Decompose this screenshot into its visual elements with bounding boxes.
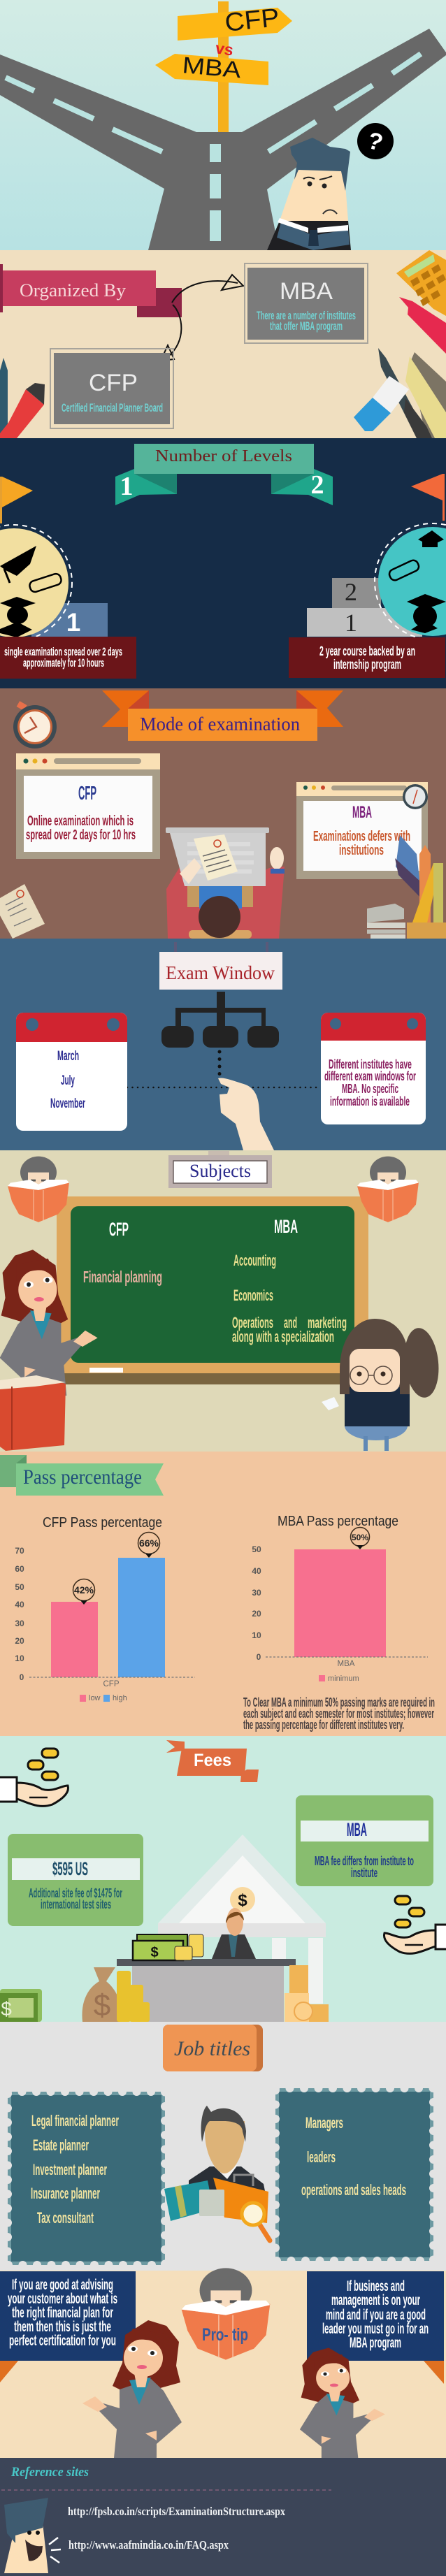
panel: MBA fee: institute	[351, 1866, 377, 1880]
ribbon: organized by	[0, 264, 182, 317]
panel: MBA levels note	[289, 637, 445, 678]
illustration: confused man	[267, 138, 351, 250]
tab: job titles: Job titles	[174, 2037, 250, 2060]
link: aafm: http://www.aafmindia.co.in/FAQ.aspx	[69, 2538, 229, 2552]
icon: reader with book	[182, 2268, 270, 2360]
ribbon: fees	[166, 1740, 259, 1782]
panel: CFP fee: international test sites	[41, 1897, 111, 1911]
bar chart: MBA pass percentage: 0	[257, 1652, 261, 1662]
title: vs: vs	[215, 38, 234, 59]
sign: subjects	[168, 1151, 272, 1188]
steps: CFP level	[31, 603, 108, 637]
icon: question mark bubble	[357, 123, 394, 159]
steps: CFP level: 1	[66, 608, 80, 637]
icon: pen and pencils	[378, 348, 446, 438]
panel: CFP exam mode window: Online examination which is	[27, 813, 134, 829]
panel: CFP fee: Additional site fee of $1475 for	[29, 1886, 122, 1900]
illustration: teacher	[0, 1250, 98, 1396]
panel: MBA fee	[296, 1795, 433, 1886]
steps: MBA levels: 1	[345, 609, 357, 637]
panel: MBA exam mode window	[296, 782, 428, 879]
icon: orange flag left	[0, 477, 33, 523]
bar chart: MBA pass percentage: MBA	[338, 1660, 355, 1668]
panel: CFP pro-tip: them then this is just the	[14, 2319, 111, 2335]
panel: CFP levels note	[0, 637, 136, 679]
panel: CFP job titles: Legal financial planner	[31, 2112, 119, 2129]
illustration: bank building	[158, 1835, 326, 2004]
icon: graduation circle left	[0, 525, 72, 641]
bar chart: CFP pass percentage: high	[113, 1694, 127, 1702]
ribbon: number of levels: Number of Levels	[155, 447, 292, 465]
heading: reference sites: Reference sites	[10, 2465, 89, 2480]
panel: CFP levels note: single examination spread over 2 days	[4, 645, 122, 658]
illustration: banker at desk	[117, 1908, 296, 2022]
tab: job titles	[163, 2025, 263, 2071]
calendar: MBA exam note: MBA. No specific	[342, 1082, 398, 1096]
panel: CFP exam mode window	[16, 753, 160, 859]
chart: org tree	[161, 992, 279, 1048]
bar chart: CFP pass percentage: 40	[15, 1600, 24, 1609]
bar chart: CFP pass percentage	[15, 1515, 195, 1702]
panel: MBA exam mode window: MBA	[352, 803, 372, 822]
text: CFP subjects: Financial planning	[83, 1268, 162, 1286]
icon: dollar badge	[230, 1887, 255, 1912]
section: pass percentage	[0, 1452, 446, 1736]
title: MBA: MBA	[181, 52, 242, 82]
icon: reader left	[8, 1157, 69, 1222]
panel: MBA pro-tip: MBA program	[350, 2335, 401, 2351]
arrow: to MBA	[172, 275, 243, 303]
sign: exam window: Exam Window	[166, 962, 275, 983]
bar chart: MBA pass percentage: MBA Pass percentage	[278, 1514, 398, 1529]
bar chart: MBA pass percentage: 50%	[352, 1533, 368, 1542]
text: MBA subjects: Economics	[233, 1287, 273, 1304]
panel: CFP job titles: Estate planner	[33, 2136, 89, 2154]
steps: MBA levels	[307, 578, 422, 637]
bar chart: MBA pass percentage: 20	[252, 1609, 261, 1619]
ribbon: mode of examination: Mode of examination	[140, 714, 300, 735]
title: CFP: CFP	[224, 3, 280, 37]
bar chart: CFP pass percentage: low	[89, 1694, 101, 1702]
signpost	[155, 1, 292, 133]
panel: CFP fee	[8, 1834, 143, 1926]
link: fpsb: http://fpsb.co.in/scripts/ExaminationStructure.aspx	[68, 2505, 285, 2518]
icon: money bag: $	[94, 1988, 110, 2023]
icon: teal pencil	[0, 358, 8, 438]
text: MBA subjects: MBA	[274, 1216, 298, 1237]
icon: cash stack	[133, 1934, 203, 1960]
ribbon: number of levels: 1	[120, 472, 133, 501]
panel: CFP exam mode window: CFP	[78, 782, 96, 804]
bar chart: MBA pass percentage	[252, 1514, 428, 1683]
icon: red books	[0, 1375, 66, 1451]
calendar: CFP exam months: March	[57, 1049, 79, 1064]
text: pro-tip: Pro- tip	[202, 2325, 248, 2345]
illustration: job seeker with briefcases	[164, 2106, 270, 2241]
bar chart: CFP pass percentage: 66%	[139, 1537, 159, 1549]
calendar: CFP exam months	[16, 1013, 127, 1131]
illustration: shouting man	[4, 2498, 61, 2573]
bar chart: CFP pass percentage: 42%	[74, 1584, 94, 1595]
text: MBA subjects	[232, 1216, 347, 1345]
icon: gold coins	[117, 1971, 150, 2022]
dotted connectors	[127, 1052, 320, 1087]
text: MBA subjects: and	[284, 1314, 297, 1331]
bar chart: CFP pass percentage: 60	[15, 1564, 24, 1574]
section: job titles	[0, 2022, 446, 2271]
icon: book stack	[367, 904, 405, 939]
steps: MBA levels: 2	[345, 578, 357, 606]
ribbon: mode of examination	[102, 690, 343, 741]
bar chart: CFP pass percentage: 70	[15, 1546, 24, 1556]
ribbon: fees: Fees	[194, 1751, 231, 1770]
icon: alarm clock	[403, 784, 428, 809]
ribbon: pass percentage: Pass percentage	[23, 1466, 142, 1489]
panel: CFP organizer: CFP	[89, 370, 138, 396]
ribbon: organized by: Organized By	[20, 280, 126, 301]
section: pro-tip	[0, 2268, 446, 2458]
panel: CFP levels note: approximately for 10 hours	[23, 656, 104, 670]
panel: MBA organizer: MBA	[280, 278, 333, 305]
panel: MBA job titles	[275, 2088, 433, 2261]
panel: CFP job titles: Insurance planner	[31, 2185, 100, 2202]
panel: CFP organizer: Certified Financial Planner Board	[62, 401, 163, 414]
icon: coins and hand right	[384, 1896, 446, 1953]
sign: subjects: Subjects	[189, 1161, 251, 1181]
bar chart: MBA pass percentage: 40	[252, 1566, 261, 1576]
illustration: student at laptop	[166, 827, 285, 939]
bar chart: MBA pass percentage: minimum	[328, 1674, 359, 1683]
panel: CFP pro-tip	[0, 2271, 136, 2382]
arrow: to CFP	[161, 305, 181, 361]
section: exam window	[0, 939, 446, 1150]
icon: stopwatch	[13, 701, 57, 748]
icon: reader right	[357, 1157, 419, 1222]
section: mode of examination	[0, 688, 446, 939]
icon: graded paper	[0, 884, 45, 939]
panel: MBA job titles: Managers	[305, 2114, 343, 2132]
icon: red pencil	[399, 297, 446, 354]
panel: CFP pro-tip: If you are good at advising	[12, 2277, 113, 2293]
icon: red marker	[0, 383, 45, 438]
panel: CFP exam mode window: spread over 2 days for 10 hrs	[26, 827, 136, 843]
icon: green banknote: $	[1, 1998, 12, 2020]
sign: exam window	[159, 942, 282, 990]
panel: CFP fee: $595 US	[52, 1858, 88, 1879]
text: MBA subjects: marketing	[308, 1314, 347, 1331]
panel: CFP job titles: Investment planner	[33, 2161, 107, 2178]
icon: calculator	[396, 250, 446, 316]
text: MBA subjects: Accounting	[233, 1252, 276, 1269]
icon: coins and hand left	[0, 1749, 69, 1806]
panel: CFP pro-tip: the right financial plan for	[12, 2305, 113, 2321]
section: fees	[0, 1736, 446, 2023]
section: hero CFP vs MBA crossroads	[0, 0, 446, 250]
bar chart: CFP pass percentage: 0	[20, 1672, 24, 1682]
icon: dollar badge: $	[238, 1891, 247, 1910]
ribbon: pass percentage	[0, 1455, 164, 1496]
panel: CFP pro-tip: your customer about what is	[8, 2291, 117, 2307]
icon: green banknote	[0, 1989, 42, 2022]
calendar: CFP exam months: November	[50, 1097, 85, 1111]
panel: MBA pro-tip	[307, 2271, 444, 2384]
panel: MBA organizer	[245, 263, 368, 343]
ribbon: number of levels: 2	[310, 470, 324, 500]
illustration: forked road	[0, 29, 446, 250]
icon: orange flag right	[411, 474, 445, 521]
illustration: chalkboard	[57, 1196, 368, 1384]
panel: MBA organizer: that offer MBA program	[270, 319, 343, 333]
section: reference sites	[0, 2458, 446, 2576]
bar chart: CFP pass percentage: 50	[15, 1582, 24, 1592]
ribbon: number of levels	[115, 444, 333, 505]
bar chart: CFP pass percentage: 10	[15, 1654, 24, 1663]
bar chart: CFP pass percentage: 30	[15, 1619, 24, 1628]
icon: cash stack: $	[150, 1945, 159, 1960]
illustration: woman right	[300, 2347, 385, 2458]
bar chart: MBA pass percentage: 10	[252, 1630, 261, 1640]
icon: money bag	[82, 1967, 121, 2023]
panel: MBA exam mode window: institutions	[339, 843, 384, 858]
bar chart: MBA pass percentage: 50	[252, 1544, 261, 1554]
icon: eraser	[354, 376, 409, 431]
section: subjects	[0, 1150, 446, 1452]
calendar: MBA exam note	[321, 1013, 426, 1124]
text: CFP subjects: CFP	[109, 1219, 129, 1240]
illustration: woman left	[82, 2320, 182, 2458]
section: organized by	[0, 250, 446, 438]
section: number of levels	[0, 438, 446, 688]
bar chart: CFP pass percentage: CFP	[103, 1680, 120, 1688]
bar chart: CFP pass percentage: 20	[15, 1636, 24, 1646]
panel: CFP pro-tip: perfect certification for you	[9, 2333, 116, 2349]
text: MBA passing note	[243, 1695, 435, 1732]
text: CFP subjects	[83, 1219, 162, 1286]
icon: pencils and books	[395, 835, 446, 939]
panel: MBA organizer: There are a number of institutes	[257, 309, 356, 322]
icon: pointing hand	[218, 1078, 274, 1150]
panel: MBA job titles: leaders	[307, 2148, 336, 2166]
panel: MBA fee: MBA	[347, 1819, 367, 1840]
icon: orange coins	[285, 1965, 329, 2022]
text: MBA subjects: Operations	[232, 1314, 273, 1331]
text: MBA subjects: along with a specialization	[232, 1328, 334, 1345]
panel: CFP job titles	[8, 2092, 165, 2265]
illustration: student girl	[322, 1319, 442, 1451]
icon: graduation circle right	[375, 523, 446, 639]
calendar: CFP exam months: July	[61, 1073, 75, 1088]
icon: question mark bubble: ?	[365, 127, 386, 157]
bar chart: CFP pass percentage: CFP Pass percentage	[43, 1515, 162, 1531]
panel: CFP job titles: Tax consultant	[37, 2209, 94, 2227]
panel: CFP organizer	[50, 349, 173, 428]
bar chart: MBA pass percentage: 30	[252, 1588, 261, 1598]
